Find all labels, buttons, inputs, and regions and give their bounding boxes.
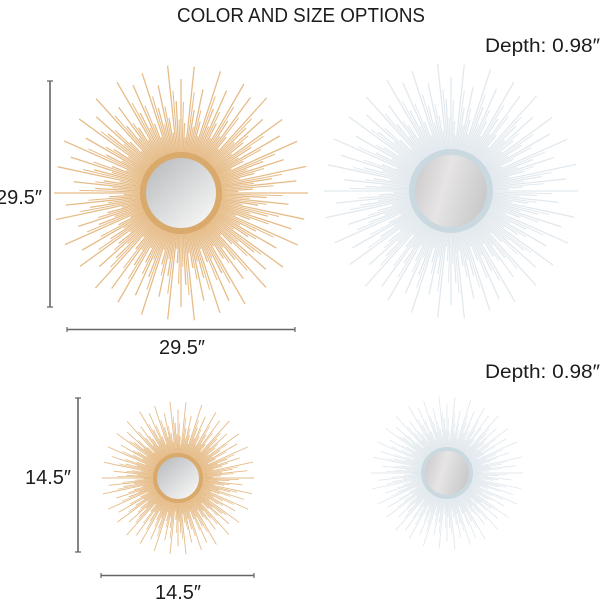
width label: large: 29.5″ — [159, 337, 205, 359]
silver large mirror — [324, 64, 578, 318]
height dimension: small — [75, 398, 81, 552]
silver small mirror — [371, 397, 523, 549]
height dimension: large — [47, 81, 53, 307]
width dimension: large — [67, 327, 295, 332]
depth label: small mirrors: Depth: 0.98″ — [485, 362, 600, 383]
gold large mirror — [54, 66, 308, 320]
height label: small: 14.5″ — [25, 467, 71, 489]
title: COLOR AND SIZE OPTIONS — [177, 5, 425, 27]
width dimension: small — [101, 573, 254, 578]
depth label: large mirrors: Depth: 0.98″ — [485, 36, 600, 57]
gold small mirror — [102, 402, 254, 554]
